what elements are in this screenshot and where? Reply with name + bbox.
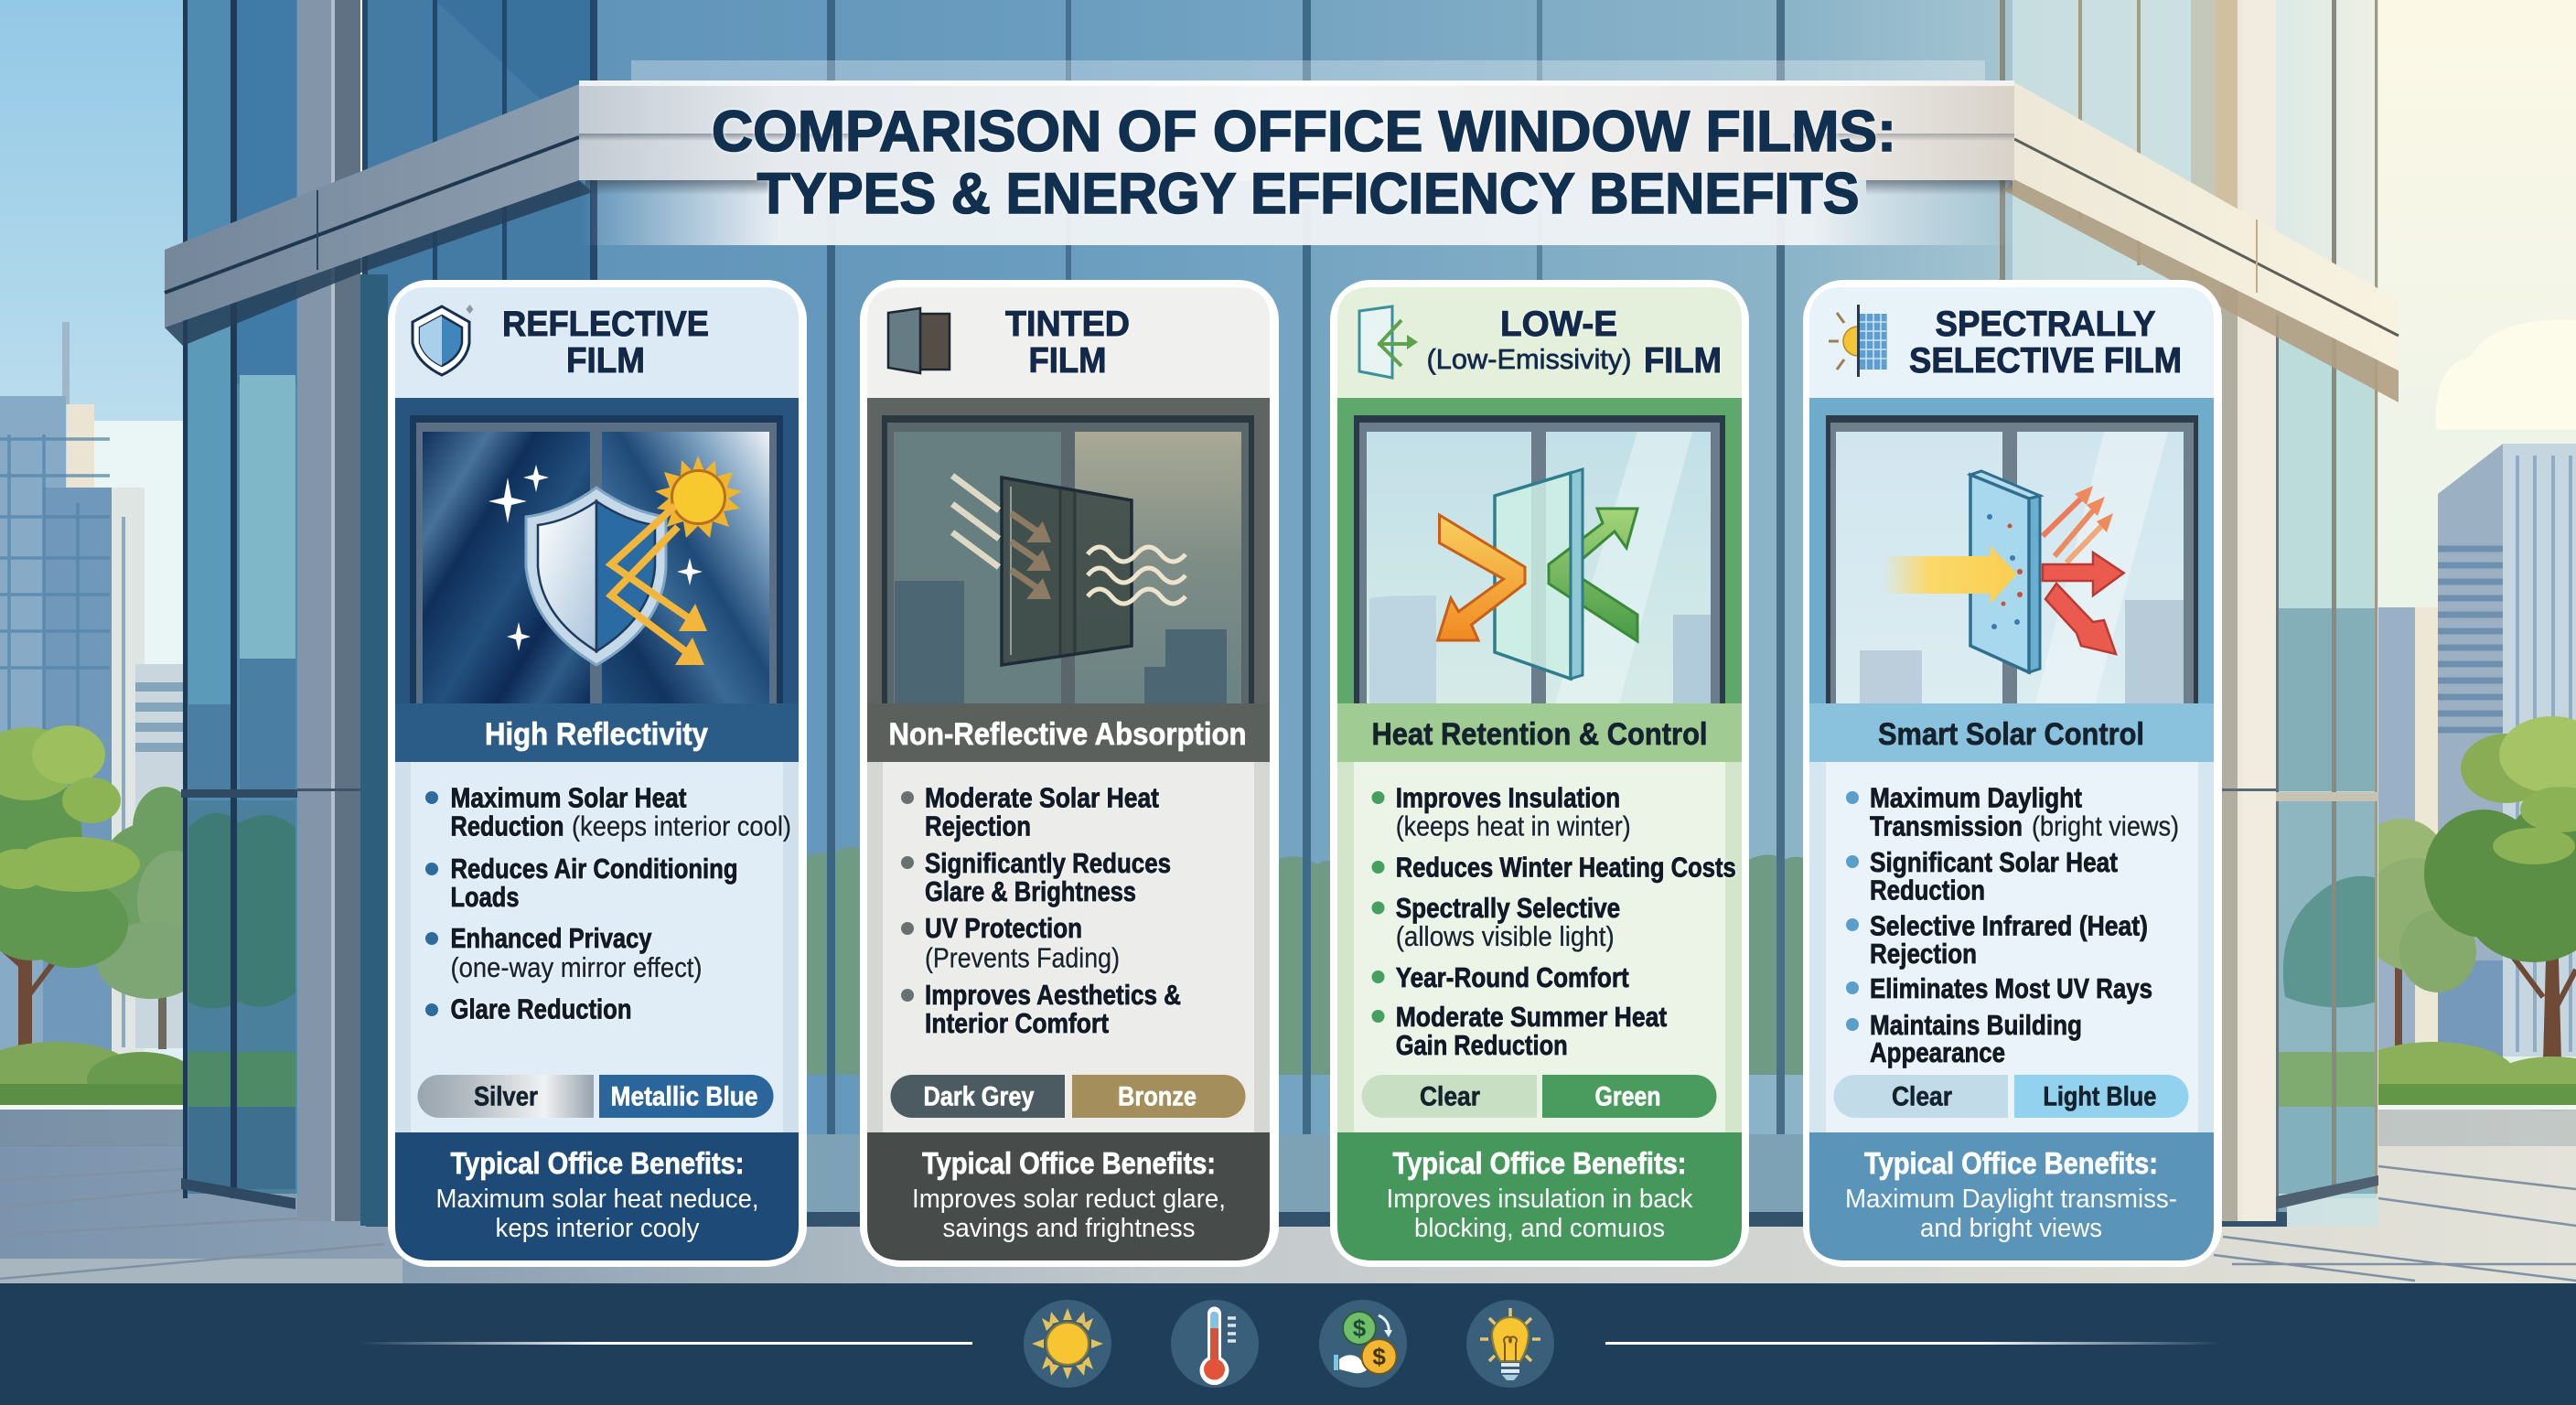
bullet list: tinted: (Prevents Fading): [925, 942, 1120, 973]
background: hedge: [0, 1042, 2576, 1111]
arrow: heat rejected horizontal (red): [2043, 552, 2124, 595]
bullet list: spectrally selective: (bright views): [2032, 810, 2179, 842]
window illustration: non-reflective absorption: [867, 398, 1270, 703]
footer bar: [0, 1283, 2576, 1405]
typical office benefits: tinted: Improves solar reduct glare,: [912, 1185, 1226, 1214]
window illustration: high reflectivity: [395, 398, 799, 703]
panel: spectrally selective film: [1803, 280, 2222, 1267]
bullet list: tinted: Significantly Reduces: [925, 847, 1171, 879]
card header: low-e: [1337, 287, 1742, 398]
bullet list: tinted: [867, 762, 1270, 1132]
background: tree right small: [2356, 819, 2476, 1063]
colour pills: clear and green: [1361, 1075, 1716, 1118]
bullet list: low-e: Year-Round Comfort: [1396, 961, 1629, 993]
bullet list: spectrally selective: Appearance: [1870, 1036, 2005, 1068]
card header: tinted: [867, 287, 1270, 398]
bullet list: reflective: Loads: [450, 881, 520, 913]
typical office benefits: spectrally selective: Typical Office Benefits:: [1864, 1146, 2158, 1180]
bullet list: tinted: Moderate Solar Heat: [925, 781, 1159, 814]
icon: low-e pane edge: [1571, 469, 1583, 679]
building: left fascia band: [165, 84, 593, 346]
icon: thermometer: [1171, 1300, 1259, 1388]
bullet list: reflective: Glare Reduction: [450, 993, 631, 1025]
bullet list: low-e: Gain Reduction: [1396, 1029, 1568, 1061]
card header: spectrally selective: [1809, 287, 2214, 398]
window illustration: heat retention: [1337, 398, 1742, 703]
typical office benefits: low-e: Improves insulation in back: [1387, 1185, 1693, 1214]
arrows: reflected solar rays: [611, 506, 707, 665]
card header: low-e: (Low-Emissivity): [1427, 343, 1632, 375]
title: [712, 100, 1896, 226]
icon: shield with rays: [526, 488, 666, 665]
background: city right: [2377, 320, 2576, 1065]
typical office benefits: tinted: savings and frightness: [942, 1214, 1195, 1243]
typical office benefits: low-e: blocking, and comuıos: [1414, 1214, 1665, 1243]
bullet list: reflective: [395, 762, 799, 1132]
arrow: visible light passing (yellow): [1883, 546, 2017, 604]
colour pills: clear and light blue: Clear: [1892, 1082, 1952, 1112]
background: tree left small: [96, 787, 210, 1049]
typical office benefits: reflective: Typical Office Benefits:: [450, 1146, 745, 1180]
icon: sun: [655, 456, 742, 538]
colour pills: dark grey and bronze: [890, 1075, 1246, 1118]
bullet list: spectrally selective: Maintains Building: [1870, 1009, 2082, 1041]
bullet list: spectrally selective: [1809, 762, 2214, 1132]
bullet list: spectrally selective: Significant Solar Heat: [1870, 846, 2118, 878]
bullet list: spectrally selective: Eliminates Most UV Rays: [1870, 972, 2152, 1004]
card header: reflective: FILM: [566, 341, 645, 381]
arrow: heat reflected (orange): [1438, 515, 1525, 640]
typical office benefits: low-e: Typical Office Benefits:: [1392, 1146, 1687, 1180]
card header: reflective: REFLECTIVE: [502, 305, 709, 344]
typical office benefits: reflective: keps interior cooly: [496, 1214, 700, 1243]
arrows: infrared rejected (orange): [2043, 486, 2113, 563]
bullet list: tinted: Rejection: [925, 810, 1031, 842]
building: central glass facade: [362, 0, 2378, 1227]
bullet list: reflective: Enhanced Privacy: [450, 922, 652, 954]
building: right fascia band: [2003, 82, 2399, 402]
bullet list: reflective: (keeps interior cool): [572, 810, 791, 842]
bullet list: tinted: Improves Aesthetics &: [925, 979, 1181, 1011]
label bar: [1337, 703, 1742, 762]
icon: sun through selective film: [1829, 305, 1887, 377]
typical office benefits: spectrally selective: Maximum Daylight transmiss-: [1845, 1185, 2177, 1214]
background: curb and pavement: [0, 1105, 2576, 1283]
bullet list: spectrally selective: Rejection: [1870, 938, 1977, 970]
card header: spectrally selective: SPECTRALLY: [1936, 305, 2155, 344]
bullet list: reflective: Maximum Solar Heat: [450, 781, 686, 814]
typical office benefits: spectrally selective: [1809, 1132, 2214, 1260]
bullet list: spectrally selective: Reduction: [1870, 874, 1985, 906]
title: COMPARISON OF OFFICE WINDOW FILMS:: [712, 100, 1896, 164]
building: right column: [2191, 0, 2276, 1221]
colour pills: clear and green: Clear: [1420, 1082, 1480, 1112]
background: sky left: [0, 0, 238, 1153]
card header: reflective: [395, 287, 799, 398]
bullet list: low-e: (keeps heat in winter): [1396, 810, 1631, 842]
panel: title sign: [579, 60, 2014, 245]
building: left column: [297, 0, 388, 1226]
label bar: Smart Solar Control: [1878, 717, 2144, 752]
background: tree right large: [2424, 716, 2576, 1061]
card header: spectrally selective: SELECTIVE FILM: [1909, 341, 2182, 381]
typical office benefits: low-e: [1337, 1132, 1742, 1260]
colour pills: clear and green: Green: [1595, 1082, 1661, 1112]
typical office benefits: spectrally selective: and bright views: [1920, 1214, 2102, 1243]
bullet list: spectrally selective: Selective Infrared (Heat): [1870, 909, 2148, 942]
card header: low-e: FILM: [1644, 341, 1722, 381]
bullet list: tinted: Glare & Brightness: [925, 875, 1136, 907]
card header: tinted: TINTED: [1005, 305, 1130, 344]
bullet list: spectrally selective: Transmission: [1870, 810, 2023, 842]
icon: sparkles: [488, 465, 703, 651]
bullet list: reflective: (one-way mirror effect): [450, 951, 703, 983]
label bar: Non-Reflective Absorption: [889, 717, 1246, 752]
building: right glass wing: [2275, 0, 2378, 1212]
icon: money savings: $: [1372, 1343, 1386, 1370]
card header: tinted: FILM: [1028, 341, 1107, 381]
bullet list: tinted: Interior Comfort: [925, 1007, 1109, 1039]
icon: selective film pane: [1970, 471, 2040, 672]
bullet list: tinted: UV Protection: [925, 912, 1082, 944]
colour pills: dark grey and bronze: Dark Grey: [924, 1082, 1035, 1112]
bullet list: reflective: Reduces Air Conditioning: [450, 853, 737, 885]
arrow: heat rejected diagonal (red): [2045, 584, 2116, 654]
icon: heat waves: [1088, 547, 1186, 604]
icon: shield: [413, 305, 474, 375]
colour pills: clear and light blue: Light Blue: [2043, 1082, 2156, 1112]
background: sky right: [2342, 0, 2576, 1153]
bullet list: low-e: (allows visible light): [1396, 920, 1615, 952]
bullet list: reflective: Reduction: [450, 810, 564, 842]
arrow: light transmitted (green): [1549, 509, 1637, 641]
background: tree left large: [0, 725, 140, 1050]
building: left glass wing: [181, 0, 298, 1209]
bullet list: low-e: Improves Insulation: [1396, 781, 1620, 814]
colour pills: silver and metallic blue: Silver: [474, 1082, 538, 1112]
typical office benefits: reflective: [395, 1132, 799, 1260]
label bar: [1809, 703, 2214, 762]
bullet list: low-e: Spectrally Selective: [1396, 892, 1620, 924]
label bar: Heat Retention & Control: [1372, 717, 1707, 752]
card header: low-e: LOW-E: [1500, 305, 1617, 344]
label bar: [395, 703, 799, 762]
title: TYPES & ENERGY EFFICIENCY BENEFITS: [757, 162, 1859, 226]
bullet list: low-e: Moderate Summer Heat: [1396, 1001, 1667, 1033]
panel: tinted film: [860, 280, 1279, 1267]
icon: sun: [1024, 1300, 1111, 1388]
colour pills: silver and metallic blue: Metallic Blue: [611, 1082, 757, 1112]
colour pills: dark grey and bronze: Bronze: [1118, 1082, 1197, 1112]
typical office benefits: tinted: [867, 1132, 1270, 1260]
icon: tinted film sheet: [1002, 477, 1132, 665]
arrows: absorbed rays: [952, 476, 1051, 599]
window illustration: smart solar control: [1809, 398, 2214, 703]
icon: money savings: [1319, 1300, 1407, 1388]
typical office benefits: tinted: Typical Office Benefits:: [922, 1146, 1216, 1180]
colour pills: clear and light blue: [1833, 1075, 2188, 1118]
bullet list: low-e: [1337, 762, 1742, 1132]
icon: money savings: $: [1353, 1314, 1367, 1342]
label bar: High Reflectivity: [485, 717, 708, 752]
bullet list: spectrally selective: Maximum Daylight: [1870, 781, 2082, 814]
panel: reflective film: [388, 280, 807, 1267]
bullet list: low-e: Reduces Winter Heating Costs: [1396, 852, 1736, 884]
icon: tinted panes: [888, 308, 950, 373]
label bar: [867, 703, 1270, 762]
background: city left: [0, 322, 190, 1055]
icon: low-e pane with arrows: [1359, 306, 1418, 378]
panel: low-e film: [1330, 280, 1749, 1267]
typical office benefits: reflective: Maximum solar heat neduce,: [435, 1185, 759, 1214]
colour pills: silver and metallic blue: [417, 1075, 773, 1118]
icon: low-e glass pane: [1495, 473, 1571, 679]
icon: light bulb: [1466, 1300, 1554, 1388]
